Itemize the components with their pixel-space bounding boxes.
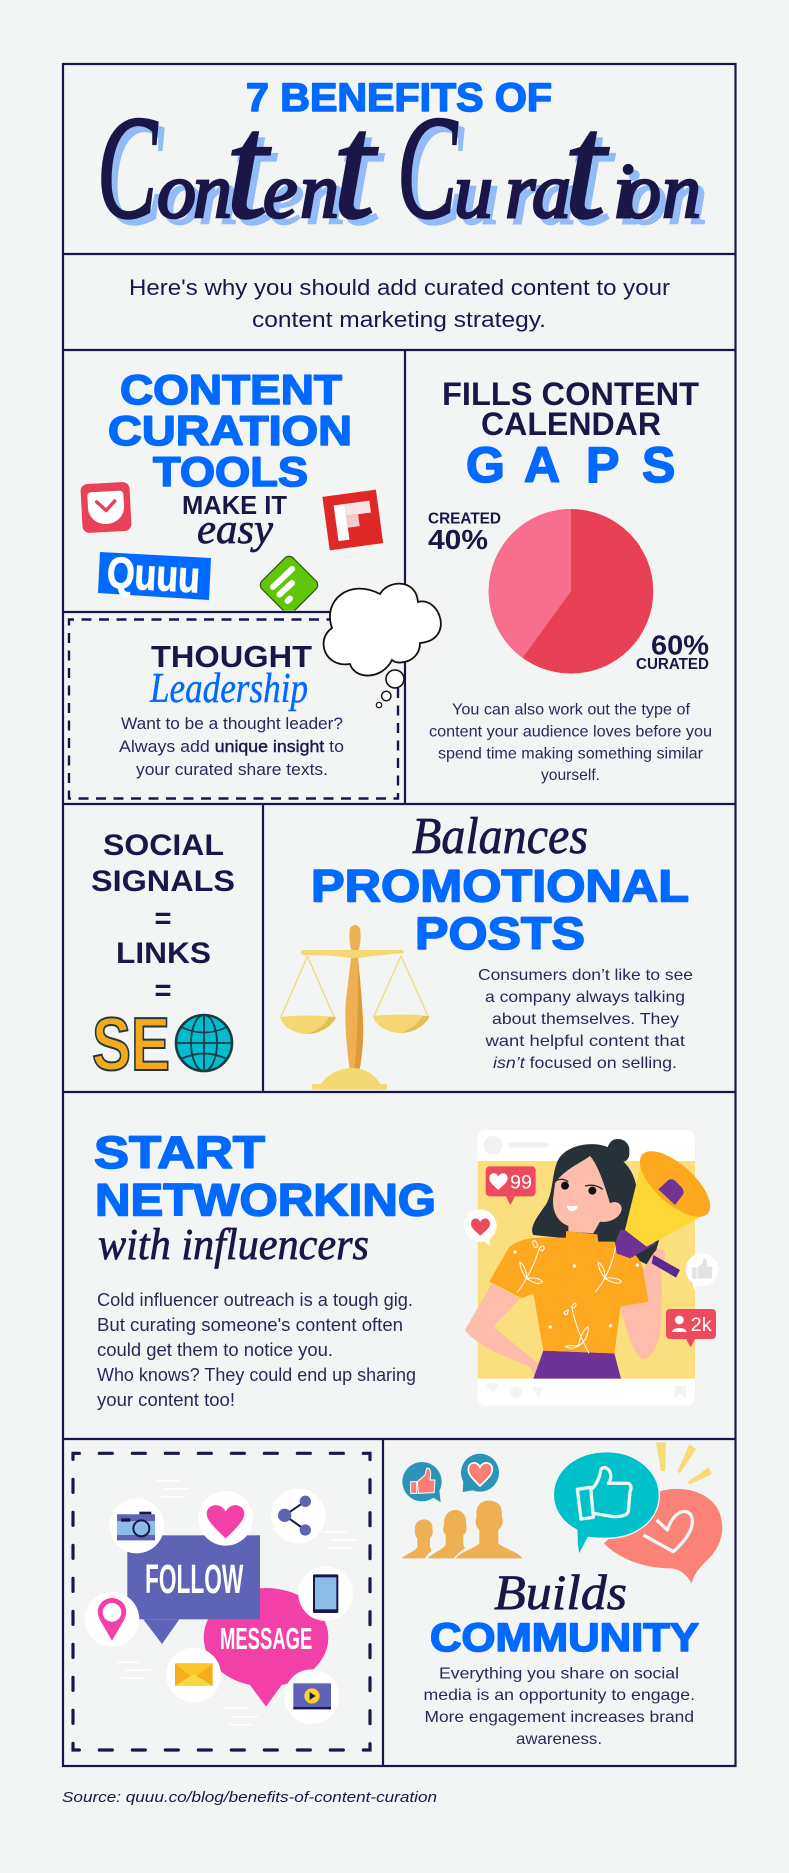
body text: Want to be a thought leader? bbox=[121, 714, 343, 733]
body text: Everything you share on social bbox=[439, 1666, 679, 1682]
subheading: make it easy bbox=[182, 490, 287, 553]
body text: spend time making something similar bbox=[438, 746, 704, 762]
icon: envelope bbox=[175, 1663, 213, 1686]
bubble: large thumbs up bbox=[553, 1452, 659, 1555]
script title shadow: ion bbox=[619, 153, 707, 240]
heading: thought: THOUGHT bbox=[151, 639, 312, 674]
icon: quuu logo: Quuu bbox=[106, 548, 201, 602]
body text: isn’t focused on selling. bbox=[493, 1055, 677, 1072]
icon: share bbox=[278, 1496, 311, 1536]
panel: fills content calendar gaps bbox=[405, 350, 735, 804]
script title shadow: en bbox=[269, 153, 345, 240]
body text: your content too! bbox=[97, 1390, 235, 1410]
panel: builds community bbox=[383, 1439, 735, 1766]
source note: Source: quuu.co/blog/benefits-of-content-curation bbox=[62, 1789, 437, 1806]
bubble: heart bbox=[464, 1209, 497, 1245]
body text bbox=[424, 1666, 695, 1748]
panel: balances promotional posts bbox=[263, 804, 735, 1092]
panel: start networking bbox=[63, 1092, 735, 1439]
subheading: make it easy: MAKE IT bbox=[182, 490, 287, 520]
script title shadow: t bbox=[570, 90, 615, 256]
label: curated 60% bbox=[636, 630, 709, 673]
heading: community: COMMUNITY bbox=[430, 1616, 699, 1660]
icon: flipboard bbox=[322, 490, 383, 550]
body text: More engagement increases brand bbox=[424, 1709, 694, 1726]
script title: C bbox=[97, 86, 158, 250]
icon: video bbox=[293, 1683, 331, 1709]
subtitle: Here's why you should add curated content to your bbox=[129, 275, 670, 300]
icon: pocket bbox=[80, 482, 132, 533]
script heading: builds: Builds bbox=[494, 1564, 627, 1620]
heading bbox=[442, 376, 699, 442]
script title: t bbox=[564, 84, 609, 250]
script title: on bbox=[157, 147, 232, 234]
subtitle: content marketing strategy. bbox=[252, 307, 546, 332]
body text bbox=[429, 702, 712, 784]
icon: balance scale bbox=[280, 925, 430, 1090]
heading: start networking: NETWORKING bbox=[95, 1174, 436, 1226]
script heading: balances: Balances bbox=[412, 808, 588, 865]
body text: Cold influencer outreach is a tough gig. bbox=[97, 1290, 413, 1310]
icon: heart bbox=[207, 1505, 244, 1538]
label: curated 60%: 60% bbox=[651, 630, 709, 660]
bubble: small thumbs up bbox=[402, 1462, 442, 1502]
body text: your curated share texts. bbox=[136, 760, 328, 779]
body text bbox=[119, 714, 344, 779]
label: created 40%: CREATED bbox=[428, 510, 501, 528]
body text bbox=[97, 1290, 416, 1410]
body text: Consumers don’t like to see bbox=[478, 967, 693, 984]
script title: ura bbox=[454, 147, 571, 234]
panel: thought leadership bbox=[63, 612, 405, 804]
icon: people silhouettes bbox=[402, 1501, 522, 1558]
script title: t bbox=[226, 84, 271, 250]
heading: CALENDAR bbox=[481, 406, 661, 442]
heading: social signals = links =: = bbox=[154, 902, 172, 935]
script title shadow: C bbox=[403, 92, 464, 256]
label: created 40% bbox=[428, 510, 501, 555]
body text: You can also work out the type of bbox=[452, 702, 691, 718]
label: created 40%: 40% bbox=[428, 524, 488, 555]
script title shadow: t bbox=[339, 90, 384, 256]
panel: content curation tools bbox=[80, 374, 384, 610]
panel: title bbox=[63, 64, 735, 256]
body text: a company always talking bbox=[485, 989, 685, 1006]
heading: content curation tools: CURATION bbox=[108, 407, 352, 454]
script title: ion bbox=[613, 147, 701, 234]
badge: 99 likes bbox=[486, 1166, 536, 1205]
heading: social signals = links =: = bbox=[154, 974, 172, 1007]
heading: FILLS CONTENT bbox=[442, 376, 699, 412]
body text: Always add unique insight to bbox=[119, 737, 344, 756]
seo wordmark with globe: SE bbox=[92, 1002, 170, 1086]
script title shadow: t bbox=[232, 90, 277, 256]
bubble: message bbox=[204, 1588, 328, 1707]
heading: promotional posts: POSTS bbox=[415, 908, 585, 959]
bubble: follow bbox=[127, 1535, 260, 1644]
label: curated 60%: CURATED bbox=[636, 656, 709, 673]
heading: social signals = links =: SOCIAL bbox=[103, 829, 224, 862]
body text: could get them to notice you. bbox=[97, 1340, 333, 1360]
heading: 7 benefits of: 7 BENEFITS OF bbox=[246, 76, 552, 120]
icon: thought cloud bbox=[324, 584, 441, 708]
script heading: with influencers: with influencers bbox=[98, 1220, 369, 1269]
heading: promotional posts: PROMOTIONAL bbox=[311, 860, 689, 912]
illustration: community and reactions bbox=[402, 1442, 722, 1583]
body text bbox=[478, 967, 693, 1072]
script title: C bbox=[397, 86, 458, 250]
heading: content curation tools bbox=[108, 366, 352, 495]
script heading: leadership: Leadership bbox=[149, 666, 308, 712]
bubble: thumbs up bbox=[686, 1253, 718, 1289]
badge: 99 likes: 99 bbox=[510, 1172, 532, 1193]
heading: gaps: GAPS bbox=[466, 437, 675, 493]
badge: 2k followers: 2k bbox=[691, 1315, 712, 1336]
heading: social signals = links =: SIGNALS bbox=[91, 865, 235, 898]
badge: 2k followers bbox=[666, 1309, 716, 1347]
heading: content curation tools: TOOLS bbox=[153, 448, 308, 495]
subheading: make it easy: easy bbox=[197, 507, 273, 553]
icon: feedly bbox=[260, 556, 318, 610]
body text: content your audience loves before you bbox=[429, 724, 712, 740]
heading: social signals = links = bbox=[91, 829, 235, 1007]
body text: But curating someone's content often bbox=[97, 1315, 403, 1335]
bubble: message: MESSAGE bbox=[220, 1622, 312, 1656]
icon: tablet bbox=[313, 1574, 338, 1613]
panel: social signals bbox=[63, 804, 263, 1092]
bubble: large heart bbox=[604, 1489, 722, 1583]
body text: awareness. bbox=[516, 1731, 602, 1748]
body text: media is an opportunity to engage. bbox=[424, 1687, 695, 1704]
body text: Who knows? They could end up sharing bbox=[97, 1365, 416, 1385]
script title: en bbox=[263, 147, 339, 234]
pie chart bbox=[489, 509, 653, 674]
panel: follow and message illustration bbox=[63, 1439, 383, 1766]
heading: start networking bbox=[94, 1127, 436, 1226]
heading: start networking: START bbox=[94, 1127, 265, 1178]
icon: camera bbox=[117, 1512, 155, 1540]
body text: yourself. bbox=[541, 767, 600, 784]
heading: promotional posts bbox=[311, 860, 689, 959]
script title: t bbox=[333, 84, 378, 250]
heading: content curation tools: CONTENT bbox=[120, 366, 342, 413]
icon: yellow rays bbox=[656, 1442, 712, 1484]
bubble: small heart bbox=[461, 1454, 499, 1492]
bubble: follow: FOLLOW bbox=[145, 1556, 244, 1602]
script title shadow: C bbox=[103, 92, 164, 256]
heading: social signals = links =: LINKS bbox=[116, 937, 211, 970]
body text: about themselves. They bbox=[492, 1011, 679, 1028]
script title shadow: on bbox=[163, 153, 238, 240]
body text: want helpful content that bbox=[484, 1033, 686, 1050]
icon: location pin bbox=[98, 1598, 126, 1641]
illustration: influencer with megaphone bbox=[464, 1130, 721, 1406]
script title shadow: ura bbox=[460, 153, 577, 240]
subtitle bbox=[129, 275, 670, 332]
